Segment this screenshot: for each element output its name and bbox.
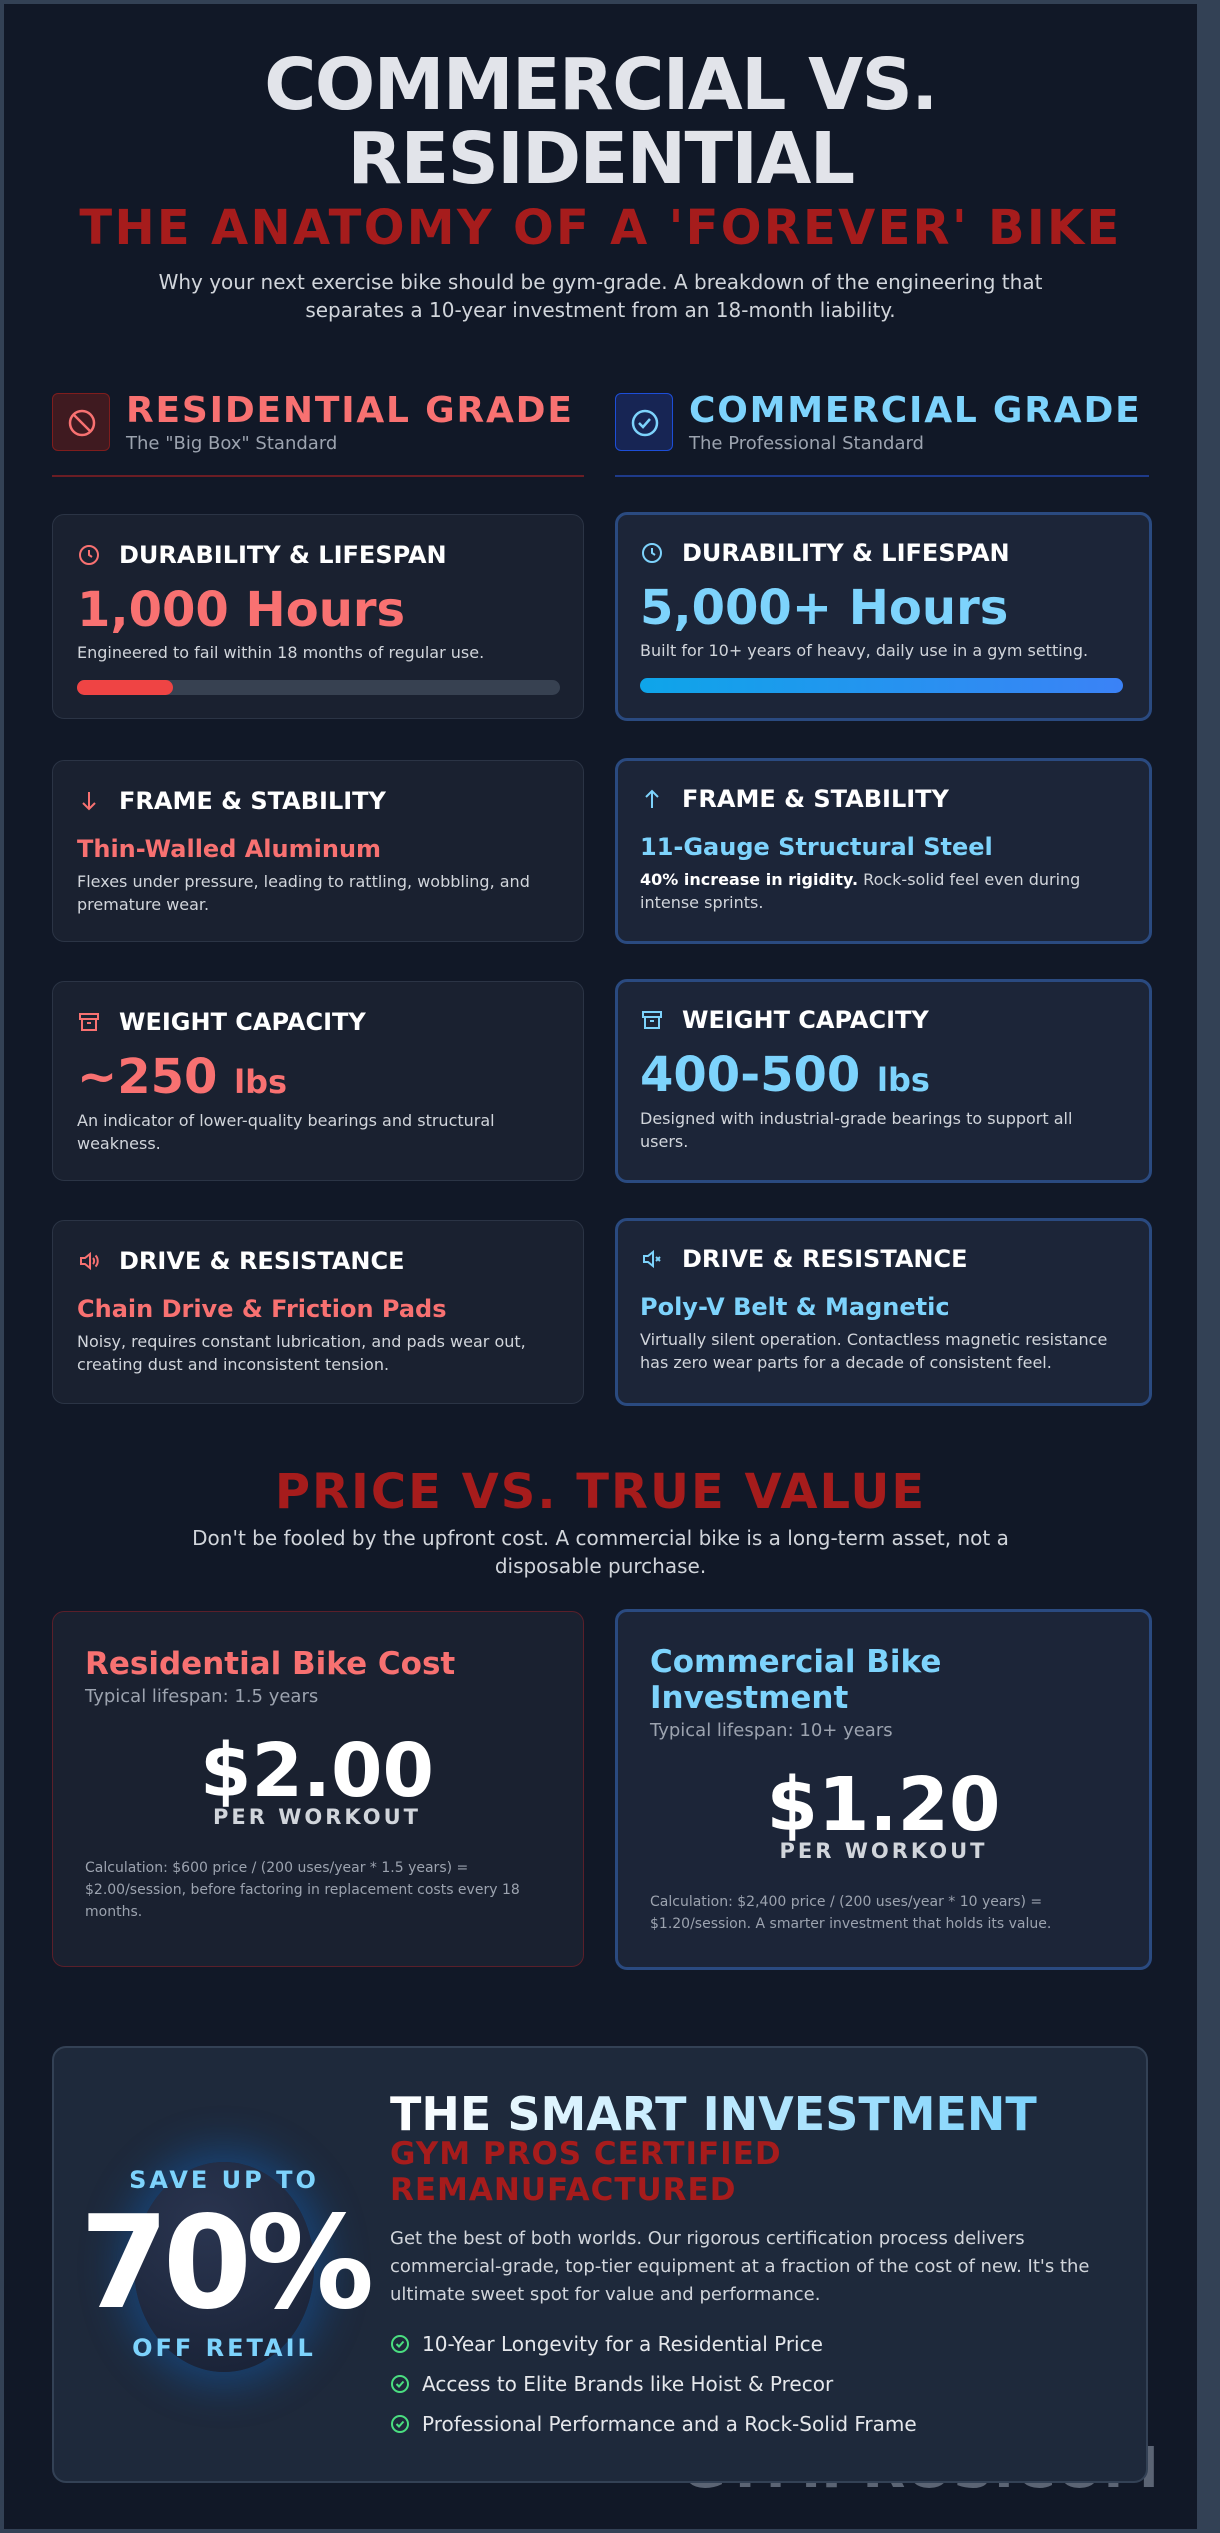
subheading: GYM PROS CERTIFIED bbox=[390, 2136, 782, 2172]
card: commercial drive: Virtually silent operation. Contactless magnetic resistance bbox=[640, 1330, 1107, 1349]
card: commercial frame: 11-Gauge Structural Steel bbox=[640, 833, 993, 861]
card: residential durability: DURABILITY & LIFESPAN bbox=[119, 541, 447, 569]
card: residential weight: ~250 lbs bbox=[77, 1049, 287, 1105]
intro paragraph: separates a 10-year investment from an 18-month liability. bbox=[305, 298, 896, 322]
card: residential durability: 1,000 Hours bbox=[77, 582, 405, 638]
price card: commercial: PER WORKOUT bbox=[780, 1839, 987, 1863]
card: residential weight bbox=[52, 981, 584, 1181]
card: commercial drive: DRIVE & RESISTANCE bbox=[682, 1245, 968, 1273]
price paragraph: Don't be fooled by the upfront cost. A commercial bike is a long-term asset, not a bbox=[192, 1526, 1009, 1550]
card: residential weight: weakness. bbox=[77, 1134, 161, 1153]
price paragraph: disposable purchase. bbox=[495, 1554, 706, 1578]
card: commercial drive bbox=[615, 1218, 1152, 1406]
subheading bbox=[390, 2136, 782, 2208]
card: residential durability: Engineered to fail within 18 months of regular use. bbox=[77, 643, 484, 662]
icon: check bbox=[615, 393, 673, 451]
card: residential weight: An indicator of lower-quality bearings and structural bbox=[77, 1111, 495, 1130]
checklist bbox=[391, 2332, 917, 2436]
header: residential grade bbox=[52, 393, 584, 477]
header: commercial grade bbox=[615, 393, 1149, 477]
title: COMMERCIAL VS. bbox=[264, 43, 937, 126]
progress bar bbox=[77, 680, 560, 695]
card: residential drive: creating dust and inconsistent tension. bbox=[77, 1355, 389, 1374]
price card: commercial bbox=[615, 1609, 1152, 1970]
card: commercial weight: users. bbox=[640, 1132, 688, 1151]
card: residential durability bbox=[52, 514, 584, 719]
card: commercial frame: intense sprints. bbox=[640, 893, 763, 912]
badge: save up to 70%: SAVE UP TO bbox=[129, 2166, 319, 2194]
price paragraph bbox=[192, 1526, 1009, 1578]
checklist: Access to Elite Brands like Hoist & Precor bbox=[422, 2372, 833, 2396]
badge: save up to 70%: 70% bbox=[80, 2189, 368, 2338]
intro paragraph bbox=[159, 270, 1042, 322]
card: commercial drive: Poly-V Belt & Magnetic bbox=[640, 1293, 950, 1321]
price card: residential bbox=[52, 1611, 584, 1967]
card: commercial durability: Built for 10+ years of heavy, daily use in a gym setting. bbox=[640, 641, 1088, 660]
watermark: GYMPROS.COM bbox=[680, 2436, 1159, 2501]
progress bar bbox=[640, 678, 1123, 693]
card: commercial weight: Designed with industrial-grade bearings to support all bbox=[640, 1109, 1072, 1128]
subtitle: THE ANATOMY OF A 'FOREVER' BIKE bbox=[79, 200, 1122, 256]
heading: COMMERCIAL GRADE bbox=[689, 390, 1142, 431]
icon: prohibited bbox=[52, 393, 110, 451]
price card: commercial: $1.20 bbox=[766, 1762, 1001, 1848]
checklist: 10-Year Longevity for a Residential Price bbox=[422, 2332, 823, 2356]
paragraph: Get the best of both worlds. Our rigorous certification process delivers commercial-grade, top-tier equipment at a fraction of the cost of new. It's the ultimate sweet spot for value and performance. bbox=[390, 2228, 1090, 2305]
price card: residential: $2.00 bbox=[200, 1728, 434, 1814]
card: residential frame bbox=[52, 760, 584, 942]
header: residential grade: The "Big Box" Standard bbox=[126, 433, 337, 454]
price card: commercial: Investment bbox=[650, 1680, 848, 1716]
price card: commercial: Commercial Bike bbox=[650, 1644, 941, 1680]
card: residential frame: Flexes under pressure, leading to rattling, wobbling, and bbox=[77, 872, 530, 891]
price card: residential: Calculation: $600 price / (200 uses/year * 1.5 years) = bbox=[85, 1860, 468, 1876]
price card: commercial: Typical lifespan: 10+ years bbox=[650, 1720, 893, 1741]
price card: commercial: Calculation: $2,400 price / (200 uses/year * 10 years) = bbox=[650, 1894, 1042, 1910]
card: commercial frame: FRAME & STABILITY bbox=[682, 785, 949, 813]
card: residential frame: premature wear. bbox=[77, 895, 209, 914]
card: residential weight: WEIGHT CAPACITY bbox=[119, 1008, 366, 1036]
price card: residential: months. bbox=[85, 1904, 142, 1920]
card: commercial frame: 40% increase in rigidity. Rock-solid feel even during bbox=[640, 870, 1080, 889]
subheading: REMANUFACTURED bbox=[390, 2172, 736, 2208]
title bbox=[264, 43, 937, 200]
intro paragraph: Why your next exercise bike should be gym-grade. A breakdown of the engineering that bbox=[159, 270, 1042, 294]
heading: price vs value: PRICE VS. TRUE VALUE bbox=[275, 1464, 926, 1520]
header: commercial grade: The Professional Standard bbox=[689, 433, 924, 454]
price card: residential: Residential Bike Cost bbox=[85, 1646, 455, 1682]
card: commercial durability bbox=[615, 512, 1152, 721]
badge: save up to 70%: OFF RETAIL bbox=[132, 2334, 316, 2362]
card: residential drive: Noisy, requires constant lubrication, and pads wear out, bbox=[77, 1332, 526, 1351]
card: commercial weight: WEIGHT CAPACITY bbox=[682, 1006, 929, 1034]
card: commercial weight: 400-500 lbs bbox=[640, 1047, 930, 1103]
checklist: Professional Performance and a Rock-Solid Frame bbox=[422, 2412, 917, 2436]
price card: residential: PER WORKOUT bbox=[213, 1805, 421, 1829]
card: residential drive: Chain Drive & Friction Pads bbox=[77, 1295, 446, 1323]
title: RESIDENTIAL bbox=[347, 117, 854, 200]
price card: commercial: $1.20/session. A smarter investment that holds its value. bbox=[650, 1916, 1051, 1932]
card: commercial durability: DURABILITY & LIFESPAN bbox=[682, 539, 1010, 567]
card: residential drive bbox=[52, 1220, 584, 1404]
price card: residential: $2.00/session, before factoring in replacement costs every 18 bbox=[85, 1882, 520, 1898]
badge: save up to 70% bbox=[80, 2130, 370, 2404]
heading: RESIDENTIAL GRADE bbox=[126, 390, 574, 431]
price card: residential: Typical lifespan: 1.5 years bbox=[85, 1686, 318, 1707]
panel: smart investment bbox=[52, 2046, 1148, 2483]
card: residential frame: FRAME & STABILITY bbox=[119, 787, 386, 815]
card: residential drive: DRIVE & RESISTANCE bbox=[119, 1247, 404, 1275]
card: residential frame: Thin-Walled Aluminum bbox=[77, 835, 381, 863]
card: commercial weight bbox=[615, 979, 1152, 1183]
card: commercial frame bbox=[615, 758, 1152, 944]
card: commercial drive: has zero wear parts for a decade of consistent feel. bbox=[640, 1353, 1052, 1372]
card: commercial durability: 5,000+ Hours bbox=[640, 580, 1008, 636]
heading: THE SMART INVESTMENT bbox=[390, 2087, 1037, 2141]
